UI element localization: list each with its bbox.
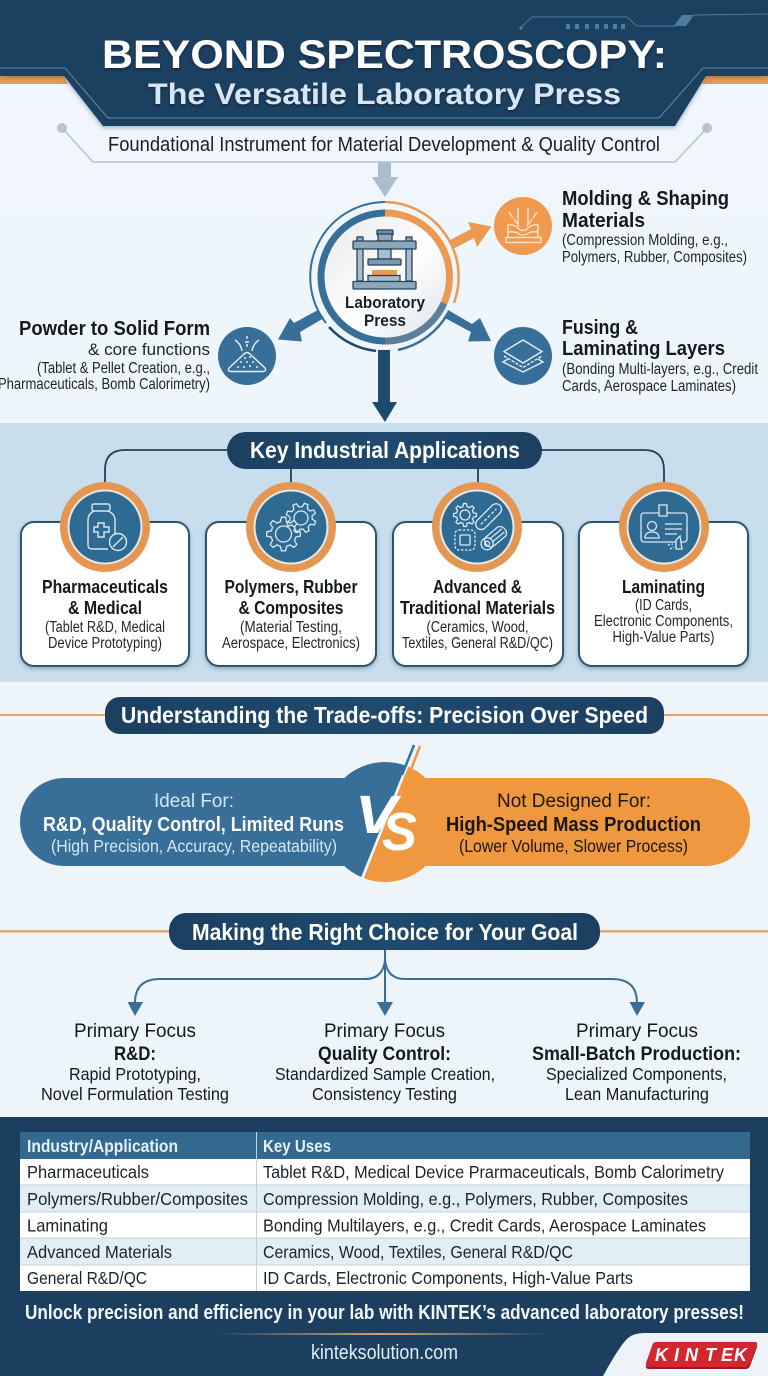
card: laminating [579,482,748,666]
header circuit decoration [519,14,768,30]
summary table: Key Uses [263,1136,331,1156]
card: laminating: Electronic Components, [594,613,733,630]
heading: key industrial applications [227,432,542,469]
arrow: to fusing [445,310,491,342]
card: pharmaceuticals: Pharmaceuticals [42,577,168,597]
tagline with bracket: Foundational Instrument for Material Development & Quality Control [108,133,660,156]
summary table: Advanced Materials [27,1242,172,1262]
icon: gears [267,499,320,551]
column: small-batch production: Specialized Components, [546,1064,727,1084]
text: ideal for: R&D, Quality Control, Limited Runs [43,813,344,836]
summary table: ID Cards, Electronic Components, High-Value Parts [263,1268,633,1288]
website: kinteksolution.com [311,1342,458,1364]
logo: KINTEK: KINTEK [655,1345,749,1365]
text: powder to solid form [0,318,210,393]
column: small-batch production: Lean Manufacturing [565,1084,709,1104]
arrow: to powder [278,310,324,342]
card: polymers: Polymers, Rubber [224,577,358,597]
text: molding and shaping [562,188,747,266]
summary table: Ceramics, Wood, Textiles, General R&D/QC [263,1242,573,1262]
summary table: Compression Molding, e.g., Polymers, Rubber, Composites [263,1189,688,1209]
column: R&D [41,1020,229,1104]
column: small-batch production: Small-Batch Production: [532,1043,741,1065]
column: quality control: Consistency Testing [312,1084,457,1104]
text: ideal for: Ideal For: [154,790,234,812]
icon: id card [641,505,687,549]
text: not designed for: Not Designed For: [497,790,651,812]
card: polymers: & Composites [238,598,344,618]
text: fusing and laminating: Laminating Layers [562,338,725,360]
heading: understanding the trade-offs: Understanding the Trade-offs: Precision Over Speed [121,702,648,728]
hub label: Press [364,312,406,330]
text: not designed for [446,790,701,856]
card: pharmaceuticals: & Medical [68,598,142,618]
card: polymers: Aerospace, Electronics) [222,635,360,652]
card: advanced materials [393,482,563,666]
column: quality control: Quality Control: [318,1043,451,1065]
summary table: Industry/Application [27,1136,178,1156]
tagline with bracket [57,123,712,162]
column: small-batch production: Primary Focus [576,1020,698,1042]
column: R&D: Novel Formulation Testing [41,1084,229,1104]
arrow: to molding [448,222,492,249]
card: laminating: (ID Cards, [635,597,692,614]
heading: making the right choice [0,913,768,950]
text: fusing and laminating [562,317,759,395]
hub label [345,294,426,330]
card: advanced materials: (Ceramics, Wood, [426,619,528,636]
panel: key industrial applications [0,423,768,682]
hub label: Laboratory [345,294,426,312]
heading: making the right choice: Making the Right Choice for Your Goal [192,919,578,945]
logo: KINTEK [603,1333,768,1376]
arrow: down to applications [372,350,397,422]
title: BEYOND SPECTROSCOPY: [102,33,667,77]
text: powder to solid form: & core functions [88,340,210,359]
column: R&D: Rapid Prototyping, [69,1064,201,1084]
comparison: ideal for vs not designed for [20,745,750,882]
card: laminating: High-Value Parts) [612,629,714,646]
text: molding and shaping: (Compression Molding, e.g., [562,232,728,249]
card: pharmaceuticals: Device Prototyping) [48,635,162,652]
decision tree arrows [128,950,645,1016]
column: small-batch production [532,1020,741,1104]
card: advanced materials: Traditional Materials [400,598,555,618]
central press hub [310,202,459,351]
connector lines [105,450,664,490]
summary table [20,1132,750,1291]
VS badge: S [382,802,417,862]
column: R&D: Primary Focus [74,1020,196,1042]
summary table: Pharmaceuticals [27,1162,149,1182]
column: quality control [275,1020,495,1104]
card: laminating: Laminating [622,577,705,597]
card: polymers: (Material Testing, [240,619,342,636]
footer panel [0,1117,768,1376]
text: ideal for: (High Precision, Accuracy, Repeatability) [51,836,337,856]
summary table: Bonding Multilayers, e.g., Credit Cards, Aerospace Laminates [263,1216,706,1236]
text: powder to solid form: Pharmaceuticals, Bomb Calorimetry) [0,376,210,393]
column: quality control: Primary Focus [324,1020,445,1042]
text: not designed for: High-Speed Mass Production [446,813,701,836]
text: ideal for [43,790,344,856]
card: advanced materials: Advanced & [433,577,522,597]
icon: laboratory press [353,230,416,289]
text: fusing and laminating: Cards, Aerospace Laminates) [562,378,736,395]
summary table: Laminating [27,1216,108,1236]
card: pharmaceuticals: (Tablet R&D, Medical [45,619,165,636]
summary table: Polymers/Rubber/Composites [27,1189,248,1209]
column: R&D: R&D: [114,1043,156,1065]
icon: molding [494,197,552,255]
card: pharmaceuticals [21,482,189,666]
text: molding and shaping: Molding & Shaping [562,188,729,210]
VS badge [355,785,417,862]
summary table: Tablet R&D, Medical Device Prarmaceuticals, Bomb Calorimetry [263,1162,724,1182]
icon: materials [454,501,509,552]
card: polymers [206,482,376,666]
text: fusing and laminating: Fusing & [562,317,638,339]
arrow: into press [372,162,398,197]
card: advanced materials: Textiles, General R&D/QC) [402,635,553,652]
icon: layers [494,327,552,385]
heading: understanding the trade-offs [0,697,768,734]
text: molding and shaping: Materials [562,210,645,232]
text: powder to solid form: Powder to Solid Form [19,318,210,340]
VS badge: V [355,785,402,845]
icon: medicine bottle [88,504,126,550]
column: quality control: Standardized Sample Creation, [275,1064,495,1084]
text: not designed for: (Lower Volume, Slower Process) [459,836,688,856]
summary table: General R&D/QC [27,1268,147,1288]
subtitle: The Versatile Laboratory Press [148,78,621,111]
heading: key industrial applications: Key Industrial Applications [250,437,520,463]
icon: powder [218,327,276,385]
text: powder to solid form: (Tablet & Pellet Creation, e.g., [37,360,210,377]
header banner [0,0,768,126]
